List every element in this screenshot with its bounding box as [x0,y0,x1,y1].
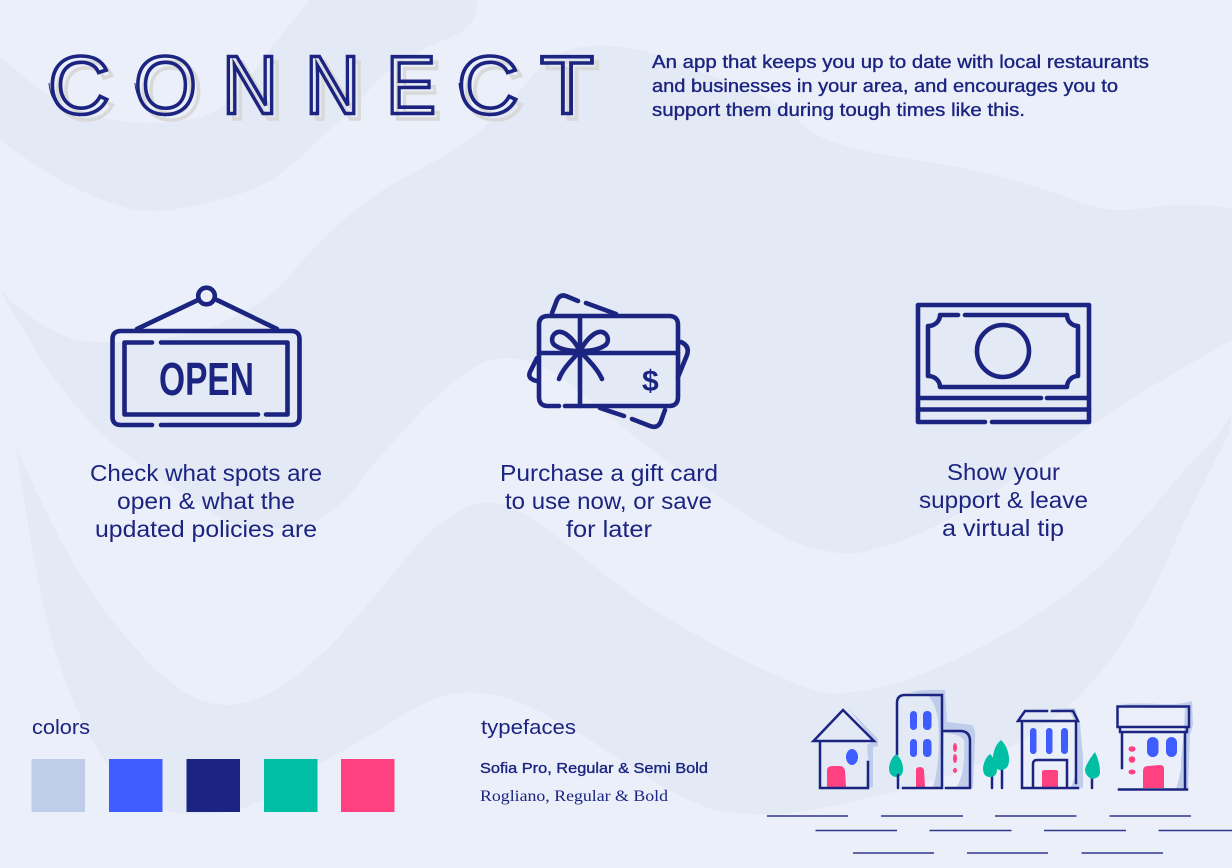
caption: tip: support & leave [919,487,1088,513]
title: C [48,38,110,132]
typeface list: Rogliano, Regular & Bold [480,788,668,805]
title: C [54,44,116,137]
caption: gift card: Purchase a gift card [500,460,718,486]
title [48,38,600,137]
title: C [457,38,519,132]
shop [1118,706,1189,790]
caption: gift card: to use now, or save [505,488,712,514]
title: O [134,38,197,132]
title: N [222,38,278,132]
description text: An app that keeps you up to date with local restaurants [652,52,1149,72]
caption: open [90,460,322,542]
caption: tip: a virtual tip [942,515,1064,541]
icon: banknote [918,305,1089,422]
icon: open sign: OPEN [159,353,254,405]
caption: gift card [500,460,718,542]
caption: open: Check what spots are [90,460,322,486]
title: E [392,44,442,137]
typefaces heading: typefaces [481,717,576,739]
tower [897,695,970,788]
caption: gift card: for later [566,516,652,542]
caption: tip [919,459,1088,541]
typeface list: Sofia Pro, Regular & Semi Bold [480,760,708,777]
title: C [462,44,524,137]
title: N [310,44,366,137]
description text: support them during tough times like this. [652,100,1025,120]
description text: and businesses in your area, and encourages you to [652,76,1118,96]
house [814,710,874,788]
title: O [140,44,202,137]
icon: gift card: $ [642,365,659,398]
description text [652,52,1149,120]
title: E [386,38,436,132]
colors heading: colors [32,717,90,739]
icon: open sign [112,288,300,425]
title: N [305,38,360,132]
illustration: street of buildings [767,690,1232,853]
road lines [767,816,1232,853]
caption: open: updated policies are [95,516,317,542]
caption: tip: Show your [947,459,1060,485]
title: N [228,44,284,137]
typeface list [480,760,708,805]
building shadows [848,690,1193,790]
caption: open: open & what the [117,488,295,514]
icon: gift card [529,296,688,427]
title: T [546,44,600,137]
office building [1018,711,1078,788]
trees [889,740,1100,788]
color swatches [32,759,394,812]
title: T [540,38,594,132]
